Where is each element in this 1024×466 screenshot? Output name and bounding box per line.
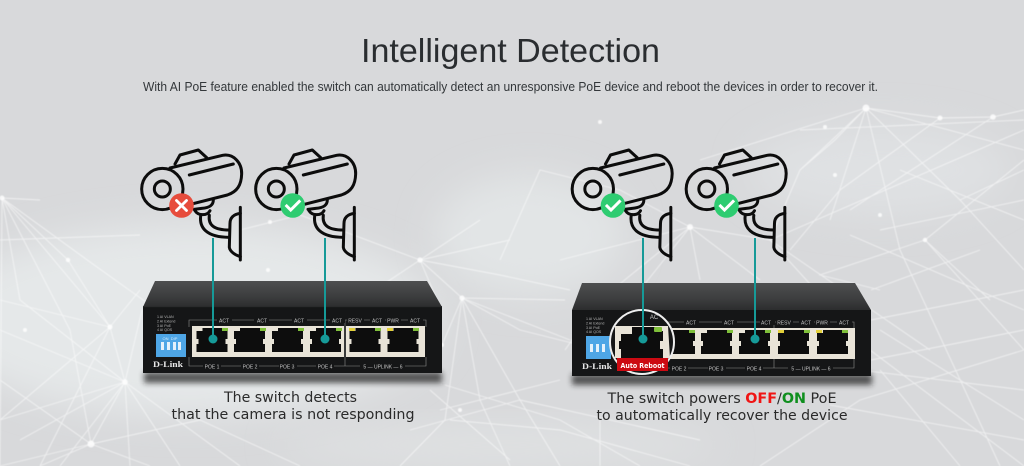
- switch: right: ACT: [801, 320, 811, 326]
- callout: magnified port with auto reboot: Auto Reboot: [620, 362, 665, 370]
- title: Intelligent Detection: [361, 32, 660, 69]
- port frame: [189, 320, 426, 366]
- switch: right: 2 AI Extend: [586, 322, 604, 326]
- callout: magnified port with auto reboot: AC: [650, 315, 659, 321]
- icon: camera online: [256, 150, 356, 260]
- switch: right: 5 — UPLINK — 6: [791, 366, 831, 372]
- brand: D-Link: [153, 360, 184, 369]
- switch: right: ACT: [686, 320, 696, 326]
- callout: magnified port with auto reboot: [610, 310, 674, 374]
- text: that the camera is not responding: [172, 407, 414, 423]
- dip switch: ON DIP: [163, 336, 178, 341]
- switch: right: ACT: [839, 320, 849, 326]
- switch: right: 4 AI QOS: [586, 330, 602, 334]
- switch: left: ACT: [257, 318, 267, 324]
- panel: left camera scene: [142, 150, 442, 406]
- switch: right: POE 2: [672, 366, 687, 372]
- icon: camera online: [686, 150, 786, 260]
- switch: left: 1 AI VLAN: [157, 315, 174, 319]
- switch: left: 3 AI PoE: [157, 324, 172, 328]
- panel: right camera scene: [572, 150, 872, 407]
- switch: right: RESV: [777, 320, 791, 326]
- subtitle: With AI PoE feature enabled the switch can automatically detect an unresponsive PoE device and reboot the devices in order to recover it.: [143, 80, 878, 94]
- switch: left: ACT: [372, 318, 382, 324]
- switch: right: PWR: [816, 320, 828, 326]
- switch: left: 2 AI Extend: [157, 320, 175, 324]
- connector lines: [208, 238, 330, 344]
- switch: right: 3 AI PoE: [586, 326, 601, 330]
- background network pattern: [0, 104, 1024, 466]
- switch: right: ACT: [724, 320, 734, 326]
- icon: camera recovered: [572, 150, 672, 260]
- switch: left: PWR: [387, 318, 399, 324]
- switch: left: 5 — UPLINK — 6: [363, 364, 403, 370]
- switch: right: 1 AI VLAN: [586, 317, 603, 321]
- switch: left: ACT: [332, 318, 342, 324]
- switch: left: ACT: [219, 318, 229, 324]
- connector lines: [638, 238, 760, 344]
- switch: right: [572, 283, 872, 385]
- switch: left: ACT: [294, 318, 304, 324]
- switch: left: POE 4: [318, 364, 333, 370]
- brand: D-Link: [582, 362, 613, 371]
- switch: left: [143, 281, 442, 383]
- icon: camera offline: [142, 150, 242, 260]
- switch: left: POE 3: [280, 364, 295, 370]
- caption: left: The switch detects: [223, 390, 357, 406]
- switch: left: POE 2: [243, 364, 258, 370]
- dip switch: [156, 334, 186, 357]
- switch: right: ACT: [761, 320, 771, 326]
- switch: left: 4 AI QOS: [157, 328, 173, 332]
- dip switch: [586, 336, 611, 359]
- switch: left: ACT: [410, 318, 420, 324]
- text: to automatically recover the device: [596, 408, 848, 424]
- switch: left: POE 1: [205, 364, 220, 370]
- switch: left: RESV: [348, 318, 362, 324]
- switch: right: POE 3: [709, 366, 724, 372]
- caption: right: The switch powers OFF/ON PoE: [606, 391, 836, 407]
- switch: right: POE 4: [747, 366, 762, 372]
